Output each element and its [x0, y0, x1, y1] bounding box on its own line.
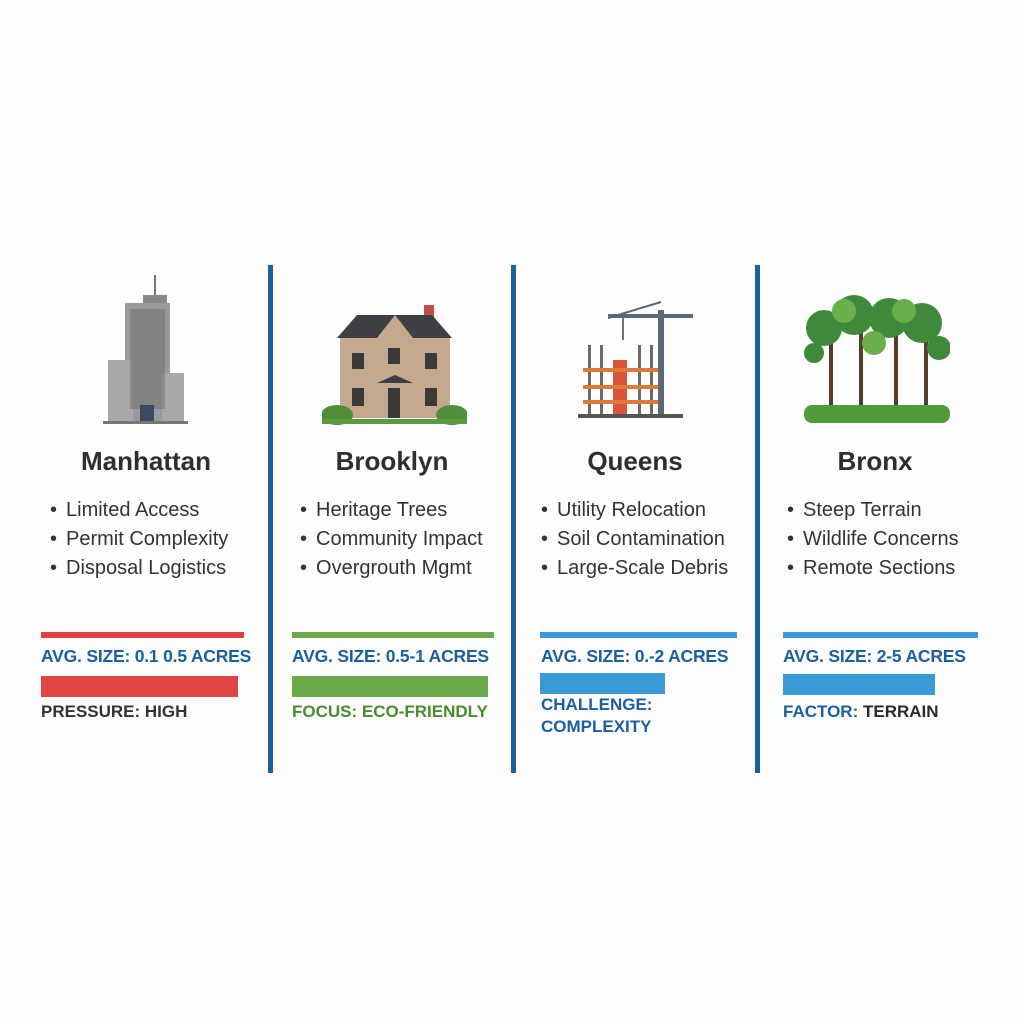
- bar: Manhattan top: [41, 632, 244, 638]
- bullets: Bronx: [788, 499, 959, 579]
- text: Queens size: AVG. SIZE: 0.-2 ACRES: [541, 646, 728, 666]
- text: Manhattan size: AVG. SIZE: 0.1 0.5 ACRES: [41, 646, 251, 666]
- bar: Bronx top: [783, 632, 978, 638]
- bullets: Brooklyn: [300, 499, 483, 579]
- bullets: Manhattan: Disposal Logistics: [66, 557, 226, 579]
- bar: Brooklyn top: [292, 632, 494, 638]
- bullets: Brooklyn: Overgrouth Mgmt: [316, 557, 472, 579]
- title: Manhattan: Manhattan: [81, 446, 211, 476]
- icon: skyscraper: [103, 275, 188, 424]
- bullets: Manhattan: Limited Access: [66, 499, 199, 521]
- text: challenge: COMPLEXITY: [541, 717, 652, 736]
- icon: crane construction: [578, 301, 693, 418]
- bullets: Brooklyn: Community Impact: [316, 528, 483, 550]
- bullets: Manhattan: [50, 499, 228, 579]
- bar: Brooklyn thick: [292, 676, 488, 697]
- bullets: Queens: [542, 499, 728, 579]
- bullets: Brooklyn: Heritage Trees: [316, 499, 447, 521]
- title: Queens: Queens: [587, 446, 683, 476]
- text: Bronx size: AVG. SIZE: 2-5 ACRES: [783, 646, 966, 666]
- title: Brooklyn: Brooklyn: [336, 446, 448, 476]
- bar: Manhattan thick: [41, 676, 238, 697]
- text: focus: FOCUS: ECO-FRIENDLY: [292, 702, 488, 721]
- bullets: Manhattan: Permit Complexity: [66, 528, 228, 550]
- icon: forest: [804, 295, 950, 423]
- bullets: Queens: Utility Relocation: [557, 499, 706, 521]
- title: Bronx: Bronx: [837, 446, 913, 476]
- bar: Queens thick: [540, 673, 665, 694]
- text: challenge: CHALLENGE:: [541, 695, 652, 714]
- text: factor: FACTOR: TERRAIN: [783, 702, 939, 721]
- text: pressure: PRESSURE: HIGH: [41, 702, 187, 721]
- bar: Queens top: [540, 632, 737, 638]
- bullets: Bronx: Wildlife Concerns: [803, 528, 959, 550]
- bullets: Queens: Large-Scale Debris: [557, 557, 728, 579]
- bullets: Bronx: Steep Terrain: [803, 499, 922, 521]
- text: Brooklyn size: AVG. SIZE: 0.5-1 ACRES: [292, 646, 489, 666]
- bullets: Bronx: Remote Sections: [803, 557, 955, 579]
- bullets: Queens: Soil Contamination: [557, 528, 725, 550]
- text: challenge: [541, 695, 652, 736]
- bar: Bronx thick: [783, 674, 935, 695]
- icon: house: [322, 305, 467, 425]
